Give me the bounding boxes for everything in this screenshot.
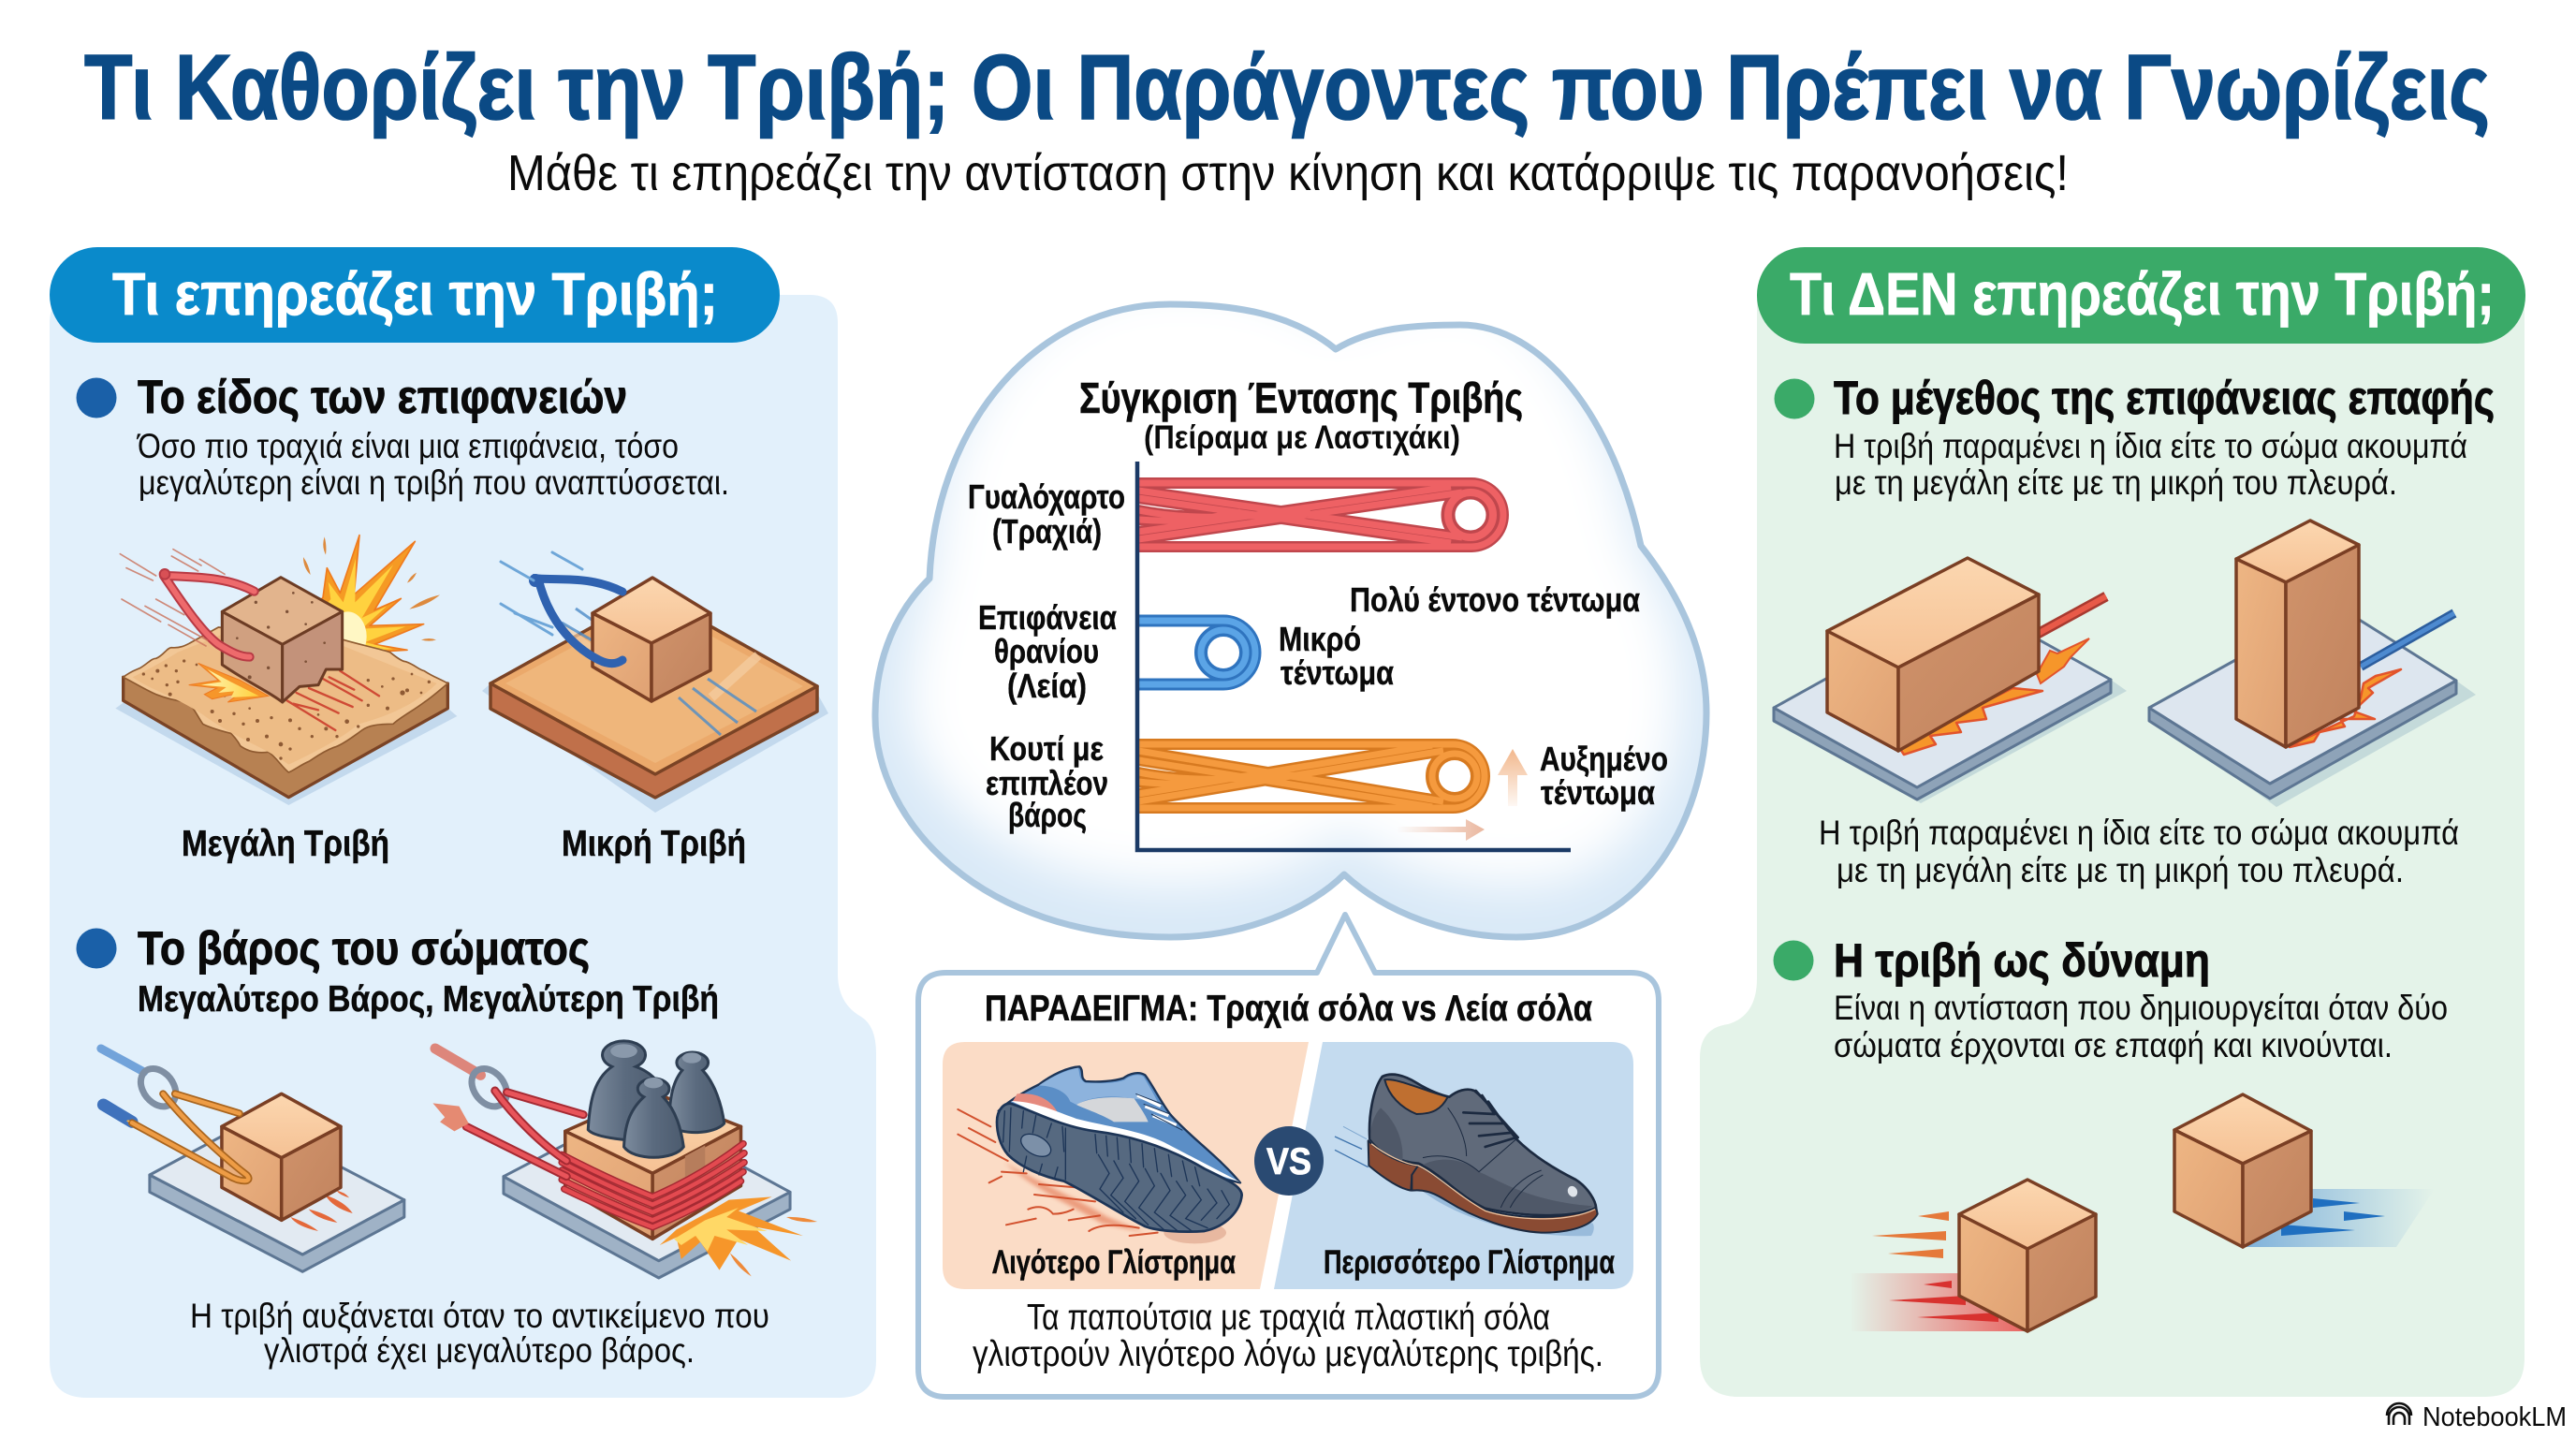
callout: increased stretch: Αυξημένο [1540,740,1668,778]
labels: desk [978,598,1117,705]
illustration: low friction on wood [482,552,828,813]
labels: desk: θρανίου [994,632,1099,670]
labels: sandpaper: (Τραχιά) [992,512,1102,550]
text: contact area description: με τη μεγάλη είτε με τη μικρή του πλευρά. [1835,463,2397,502]
blue pulling rope [501,552,622,664]
text: weight description [190,1297,769,1370]
example heading: ΠΑΡΑΔΕΙΓΜΑ: Τραχιά σόλα vs Λεία σόλα [985,989,1592,1029]
tall box [2236,521,2359,582]
label: less slipping: Λιγότερο Γλίστρημα [992,1244,1236,1281]
callout: increased stretch [1540,740,1668,812]
explosion under box [660,1196,817,1276]
heading: body weight: Το βάρος του σώματος [138,922,590,975]
labels: box: Κουτί με [989,729,1104,768]
text: weight description: γλιστρά έχει μεγαλύτερο βάρος. [264,1331,695,1370]
smooth cube [593,578,710,643]
panel: example shoes [918,915,1659,1397]
panel: what affects friction [50,247,876,1398]
text: force description [1834,989,2448,1064]
labels: sandpaper [968,477,1125,550]
text: contact area repeat: Η τριβή παραμένει η ίδια είτε το σώμα ακουμπά [1819,814,2459,852]
sand speckles [142,659,431,760]
callout box with pointer [918,915,1659,1397]
arrow: increased stretch up [1498,749,1528,806]
labels: sandpaper: Γυαλόχαρτο [968,477,1125,516]
text: force description: σώματα έρχονται σε επαφή και κινούνται. [1834,1026,2393,1064]
text: contact area repeat [1819,814,2459,889]
text: surface description: μεγαλύτερη είναι η τριβή που αναπτύσσεται. [139,463,729,502]
illustration: tall box on plate [2149,521,2476,807]
panel heading pill: Τι ΔΕΝ επηρεάζει την Τριβή; [1790,260,2495,328]
panel heading pill [50,247,780,343]
chart subtitle: (Πείραμα με Λαστιχάκι) [1144,419,1460,456]
labels: desk: Επιφάνεια [978,598,1117,637]
bullet icon [77,929,116,968]
bar chart: rubber-band stretch [1137,462,1571,850]
sand block [124,627,447,798]
rough cube [222,578,343,702]
label: low friction: Μικρή Τριβή [562,824,746,864]
axes [1137,462,1571,850]
icon: versus badge [1254,1126,1324,1196]
callout: small stretch: τέντωμα [1281,653,1394,692]
text: surface description: Όσο πιο τραχιά είναι μια επιφάνεια, τόσο [136,427,679,465]
red band: sandpaper [1138,483,1503,547]
chart title: Σύγκριση Έντασης Τριβής [1079,374,1523,422]
text: example explanation [973,1298,1603,1374]
rope with ring [101,1049,249,1181]
text: contact area description [1834,427,2467,502]
text: force description: Είναι η αντίσταση που δημιουργείται όταν δύο [1834,989,2448,1027]
heading: friction as force: Η τριβή ως δύναμη [1834,934,2210,987]
blue band: desk [1138,621,1255,684]
text: contact area repeat: με τη μεγάλη είτε με τη μικρή του πλευρά. [1837,851,2404,889]
wood board [490,683,817,798]
illustration: moving cube with red drag [1850,1180,2096,1331]
callout: very strong stretch: Πολύ έντονο τέντωμα [1350,580,1640,619]
label: more slipping: Περισσότερο Γλίστρημα [1324,1244,1615,1281]
wide box [1827,558,2039,668]
icon: dress shoe [1335,1075,1598,1236]
text: contact area description: Η τριβή παραμένει η ίδια είτε το σώμα ακουμπά [1834,427,2467,465]
box [565,1093,741,1173]
blue stick [2361,613,2454,667]
flames [2290,669,2401,747]
panel heading pill: Τι επηρεάζει την Τριβή; [112,260,718,328]
subtitle: Μάθε τι επηρεάζει την αντίσταση στην κίνηση και κατάρριψε τις παρανοήσεις! [507,145,2069,201]
flames [1900,688,2042,755]
callout: small stretch: Μικρό [1279,620,1361,658]
illustration: heavy box with weights on plate [432,1041,817,1278]
arrow: increased stretch right [1397,819,1485,841]
heading: surface type: Το είδος των επιφανειών [138,371,627,423]
illustration: wide box on plate [1774,558,2127,803]
label: high friction: Μεγάλη Τριβή [182,824,389,864]
text: surface description [136,427,729,502]
panel background [1700,300,2525,1397]
weights [588,1041,724,1157]
bullet icon [77,378,116,418]
cloud shape [875,276,1706,937]
text: example explanation: Τα παπούτσια με τραχιά πλαστική σόλα [1027,1298,1550,1338]
left shoe panel [943,1042,1309,1289]
explosion behind the cube [293,536,440,668]
text: example explanation: γλιστρούν λιγότερο λόγω μεγαλύτερης τριβής. [973,1334,1603,1374]
orange band: box with weight [1138,744,1485,808]
motion streaks [562,609,756,735]
red wraps [432,1049,744,1227]
illustration: light box on plate [101,1049,404,1271]
illustration: moving cube with blue drag [2174,1094,2435,1247]
labels: desk: (Λεία) [1007,667,1087,705]
subheading: weight: Μεγαλύτερο Βάρος, Μεγαλύτερη Τριβή [138,979,719,1020]
labels: box: επιπλέον [986,764,1108,802]
icon: sneaker sole [958,1066,1242,1243]
panel background [50,295,876,1398]
left flame [189,663,269,702]
scratch marks [287,671,379,730]
bullet icon [1775,378,1814,419]
text: weight description: Η τριβή αυξάνεται όταν το αντικείμενο που [190,1297,769,1335]
panel: thought-cloud chart [875,276,1706,937]
panel: what does not affect friction [1700,247,2525,1397]
callout: small stretch [1279,620,1394,692]
labels: box [986,729,1108,834]
red stick [2036,596,2106,635]
right shoe panel [1274,1042,1633,1289]
labels: box: βάρος [1008,796,1087,834]
panel heading pill [1757,247,2525,344]
red pulling rope [120,550,255,657]
callout: increased stretch: τέντωμα [1541,773,1655,812]
logo: NotebookLM: NotebookLM [2422,1402,2567,1432]
bullet icon [1773,940,1814,981]
icon: versus badge: VS [1266,1141,1311,1182]
illustration: high friction on sand [115,536,457,805]
friction marks [958,1109,1226,1243]
